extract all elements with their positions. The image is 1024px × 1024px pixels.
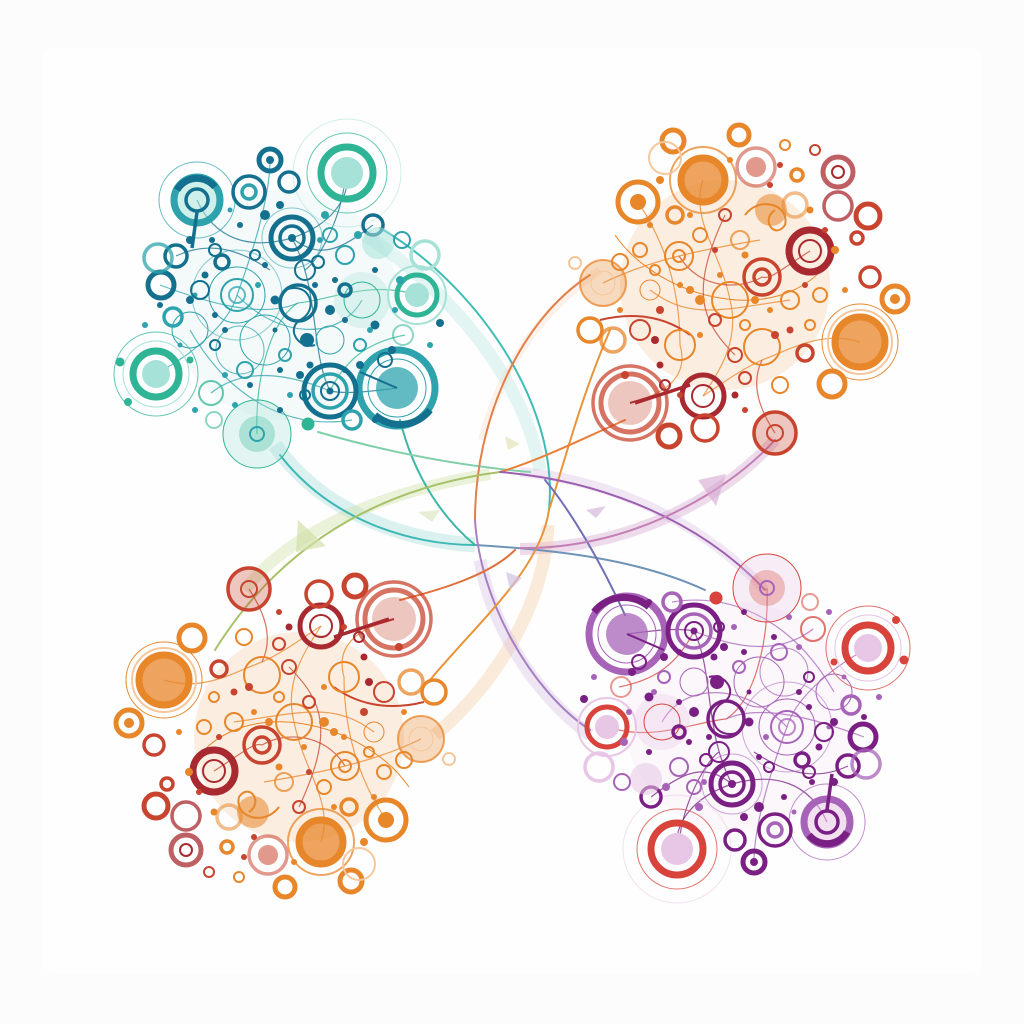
- node: red large: [593, 366, 690, 440]
- node: orange right large: [822, 304, 898, 380]
- node: blue top-left: [159, 162, 235, 248]
- node: dark concentric: [304, 365, 356, 417]
- node: pale orange left: [580, 260, 626, 306]
- node: red ring bottom right: [754, 412, 796, 454]
- node: dark red top right: [789, 230, 831, 272]
- cluster: orange bottom-left: [116, 568, 455, 897]
- cluster: teal top-left: [114, 119, 446, 468]
- node: green top: [293, 119, 401, 227]
- cluster: purple bottom-right: [578, 554, 910, 903]
- thin connecting curves: [215, 228, 775, 730]
- arrowheads on ribbons: [296, 436, 726, 590]
- node: dark red ring: [682, 375, 724, 417]
- small nodes: [142, 149, 439, 430]
- pale wide ribbons between clusters: [245, 235, 775, 735]
- node: large teal ring: [359, 350, 435, 426]
- small nodes: [569, 125, 908, 447]
- node: dark centre: [262, 208, 322, 268]
- node: green right: [388, 266, 446, 327]
- node: green left: [114, 332, 198, 416]
- node: orange top: [670, 147, 736, 213]
- node: pale central: [192, 250, 282, 340]
- cluster: orange top-right: [569, 125, 908, 454]
- node: central pale wash: [170, 190, 400, 420]
- connector lines: [156, 160, 417, 434]
- connector lines: [600, 180, 860, 433]
- node: central pale wash: [620, 180, 830, 390]
- node: pale green bottom: [223, 400, 291, 468]
